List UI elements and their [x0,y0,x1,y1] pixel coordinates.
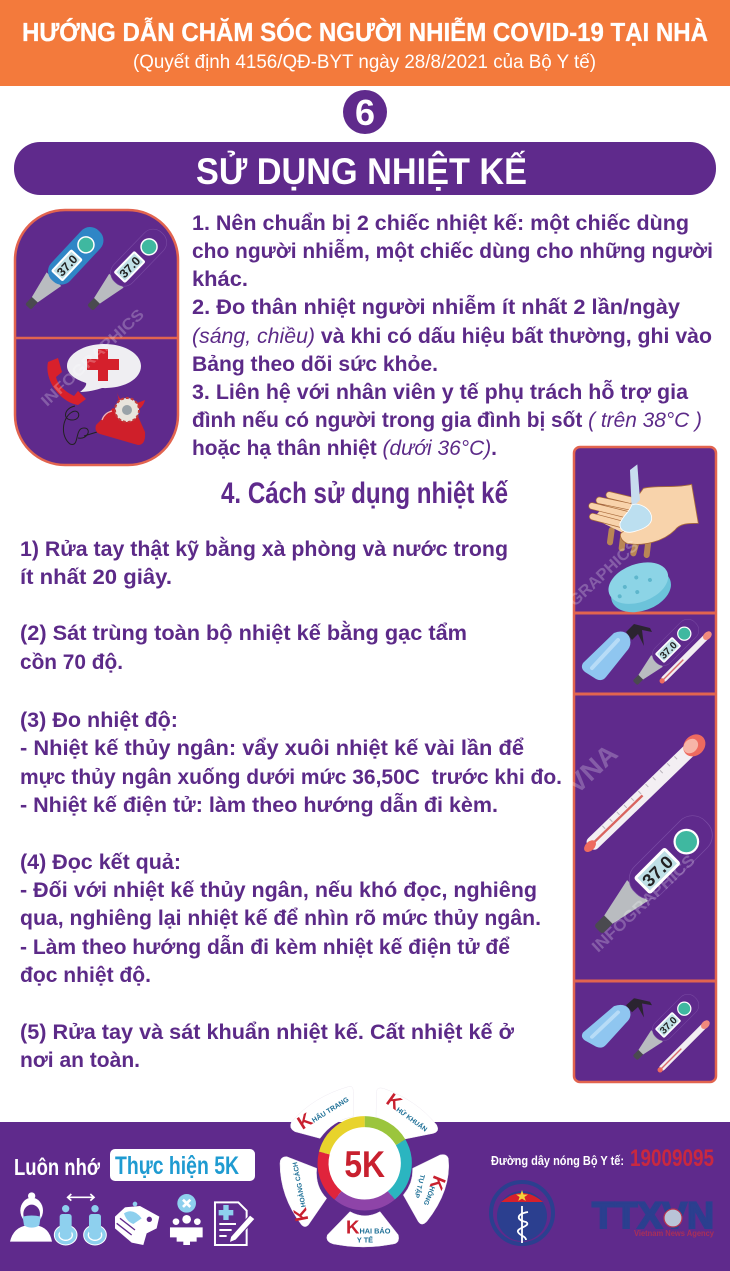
petal: disinfect: KHỬ KHUẨN [383,1089,435,1135]
icon: red rotary telephone [96,392,145,445]
text block: usage steps: (5) Rửa tay và sát khuẩn nhiệt kế. Cất nhiệt kế ở [20,1021,514,1044]
icon: digital thermometer (step 2) [627,615,703,691]
icon: woman with mask [10,1192,52,1242]
petal: no gathering: K [425,1173,450,1194]
section number badge [343,90,387,134]
text block: usage steps: - Nhiệt kế điện tử: làm theo hướng dẫn đi kèm. [20,793,498,817]
icon: blue digital thermometer: 37.0 [54,252,81,279]
text block: guidance points 1 to 3: khác. [192,268,248,291]
icon: spray bottle (step 2) [582,624,652,680]
header band [0,0,730,86]
text block: guidance points 1 to 3: (sáng, chiều) và khi có dấu hiệu bất thường, ghi vào [192,325,712,348]
icon: health declaration [215,1202,255,1245]
icon row: five K measures [10,1192,255,1245]
icon: washing hands with water [592,464,698,555]
text block: guidance points 1 to 3: cho người nhiễm, một chiếc dùng cho những người [192,239,713,263]
petal: mask [291,1086,353,1138]
text block: usage steps: (4) Đọc kết quả: [20,851,181,874]
text block: usage steps: ít nhất 20 giây. [20,566,172,589]
text block: guidance points 1 to 3: 2. Đo thân nhiệt người nhiễm ít nhất 2 lần/ngày [192,295,680,319]
icon: speech bubble with red cross [67,344,141,392]
text block: guidance points 1 to 3: Bảng theo dõi sức khỏe. [192,353,438,376]
icon: purple digital thermometer: 37.0 [117,254,144,281]
text block: guidance points 1 to 3 [192,212,713,460]
text block: usage steps: (2) Sát trùng toàn bộ nhiệt kế bằng gạc tẩm [20,621,467,645]
petal: health declaration [327,1212,399,1247]
logo: TTXVN: TTXVN [592,1195,714,1236]
petal: mask: KHẨU TRANG [293,1086,351,1133]
5K diagram [280,1086,450,1247]
text block: usage steps: - Nhiệt kế thủy ngân: vẩy xuôi nhiệt kế vài lần để [20,737,524,760]
hotline [491,1145,714,1172]
text block: guidance points 1 to 3: hoặc hạ thân nhiệt (dưới 36°C). [192,437,497,460]
watermark: infographics: INFOGRAPHICS [589,852,699,956]
text block: guidance points 1 to 3: 3. Liên hệ với nhân viên y tế phụ trách hỗ trợ gia [192,380,688,404]
icon: spray bottle (step 5) [582,998,652,1048]
watermark: INFOGRAPHICS [38,306,148,410]
footer band [0,1122,730,1271]
section title banner: SỬ DỤNG NHIỆT KẾ [196,150,527,192]
petal: no gathering: HÔNG [422,1185,437,1207]
heading: how to use a thermometer: 4. Cách sử dụng nhiệt kế [221,477,508,510]
icon: large digital thermometer: 37.0 [638,852,677,891]
petal: disinfect [376,1088,438,1139]
petal: distance: KHOẢNG CÁCH [280,1161,312,1223]
icon: purple digital thermometer [81,224,172,317]
text block: usage steps: - Đối với nhiệt kế thủy ngân, nếu khó đọc, nghiêng [20,879,537,902]
footer reminder label: Luôn nhớ [14,1154,101,1180]
5K label: 5K [344,1143,385,1185]
text block: usage steps: qua, nghiêng lại nhiệt kế để nhìn rõ mức thủy ngân. [20,907,541,930]
subtitle: (Quyết định 4156/QĐ-BYT ngày 28/8/2021 của Bộ Y tế) [133,52,596,73]
panel: right step illustrations [561,447,720,1082]
watermark: VNA: VNA [561,738,624,799]
text block: usage steps [20,537,562,1072]
icon: keep distance [54,1194,106,1245]
icon: washing hands [115,1202,159,1245]
text block: usage steps: nơi an toàn. [20,1049,140,1072]
5K call to action: Thực hiện 5K [115,1152,239,1180]
icon: mercury thermometer (step 5) [656,1019,711,1074]
icon: digital thermometer (step 5) [627,990,703,1066]
icon: digital thermometer (step 2): 37.0 [658,640,680,662]
hotline: Đường dây nóng Bộ Y tế: [491,1153,624,1168]
icon: avoid gathering [170,1194,203,1245]
icon: digital thermometer (step 5): 37.0 [658,1015,680,1037]
petal: distance [280,1157,327,1227]
text block: guidance points 1 to 3: 1. Nên chuẩn bị 2 chiếc nhiệt kế: một chiếc dùng [192,212,689,235]
section title banner [14,142,716,195]
text block: guidance points 1 to 3: đình nếu có người trong gia đình bị sốt ( trên 38°C ) [192,409,702,432]
petal: health declaration: KHAI BÁO [346,1216,391,1237]
text block: usage steps: cồn 70 độ. [20,651,123,674]
text block: usage steps: đọc nhiệt độ. [20,964,151,987]
watermark: graphics: GRAPHICS [566,537,642,610]
icon: large digital thermometer [584,808,720,944]
icon: mercury thermometer (step 2) [658,630,713,685]
text block: usage steps: 1) Rửa tay thật kỹ bằng xà phòng và nước trong [20,537,508,561]
section number badge: 6 [355,92,375,133]
text block: usage steps: mực thủy ngân xuống dưới mức 36,50C trước khi đo. [20,766,562,789]
icon: large mercury thermometer [578,730,710,858]
panel: left icons [15,210,178,465]
text block: usage steps: - Làm theo hướng dẫn đi kèm nhiệt kế điện tử để [20,935,510,959]
logo: Ministry of Health [491,1182,553,1244]
text block: usage steps: (3) Đo nhiệt độ: [20,709,178,732]
logo: TTXVN: Vietnam News Agency [634,1229,715,1238]
petal: health declaration: Y TẾ [357,1235,373,1245]
petal: no gathering: TỤ TẬP [412,1173,427,1200]
petal: no gathering [403,1155,450,1224]
icon: soap bar [603,555,677,620]
icon: blue digital thermometer [18,222,108,316]
icon: red telephone handset and cord [47,358,97,445]
ring [323,1122,406,1205]
